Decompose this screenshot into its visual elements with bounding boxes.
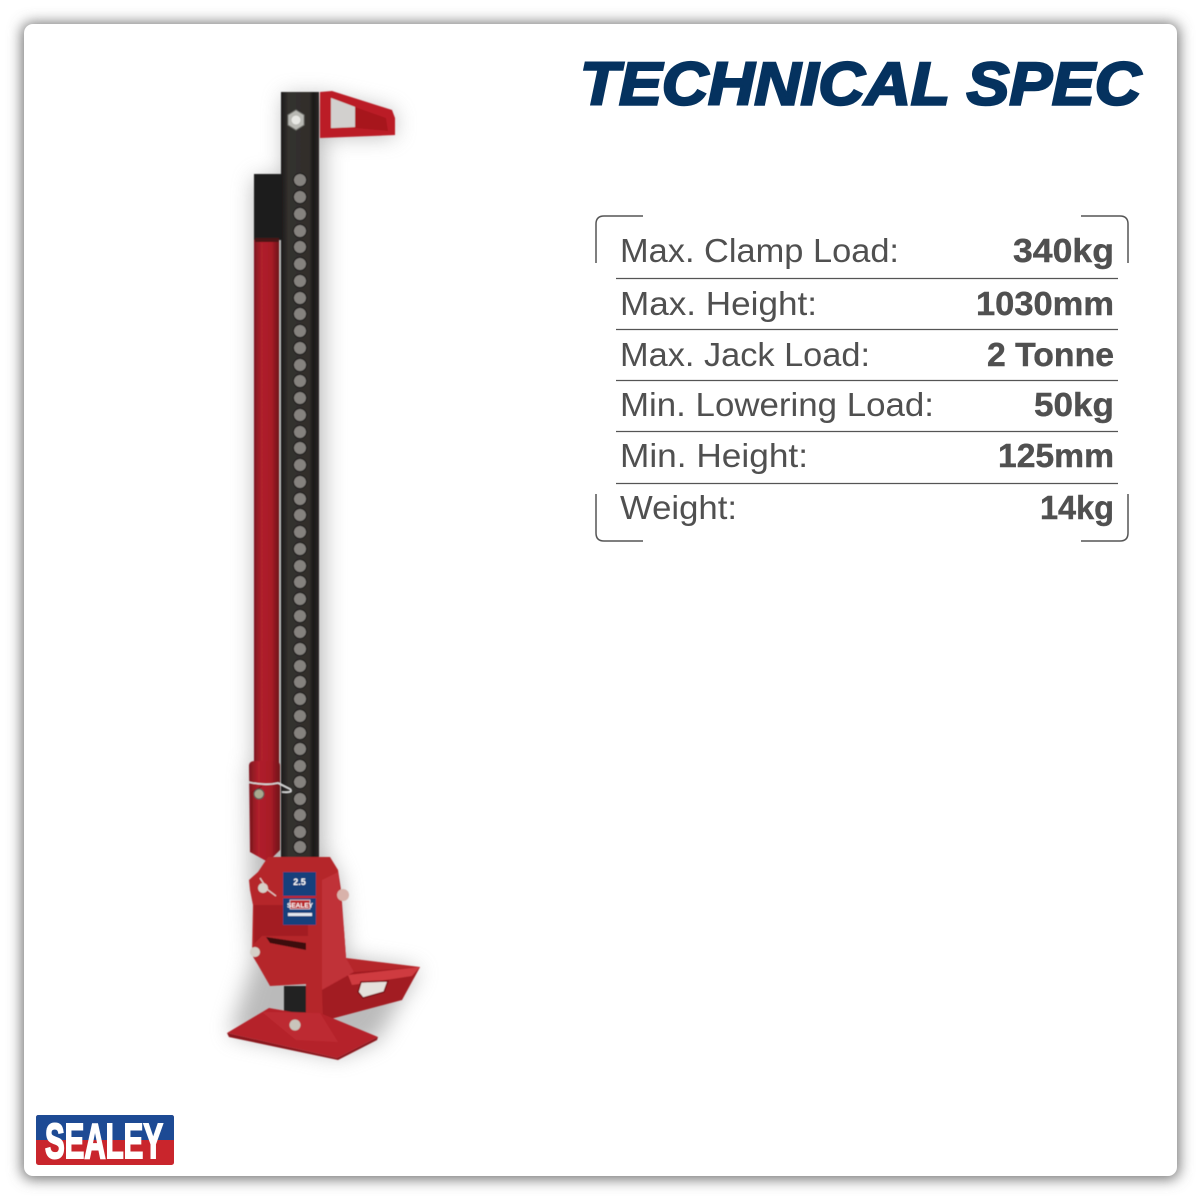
blue data plate on jack body: 2.5 (293, 877, 306, 887)
spec row: max jack load: Max. Jack Load: (620, 336, 870, 373)
spec row: max clamp load (620, 232, 1114, 269)
rack bar below body (284, 986, 306, 1014)
blue data plate on jack body: SEALEY (287, 902, 314, 910)
spec row: min height (620, 437, 1114, 474)
handle socket (249, 761, 280, 862)
spec row: max jack load: 2 Tonne (987, 336, 1114, 373)
spec row: max jack load (620, 336, 1114, 373)
slot in foot plate (358, 981, 388, 998)
spec row: max height: 1030mm (976, 285, 1114, 322)
cotter pins (258, 883, 268, 893)
red jack body (249, 857, 420, 1021)
logo: Sealey: SEALEY (45, 1115, 163, 1169)
spec row: max clamp load: 340kg (1013, 232, 1114, 269)
spec row: max clamp load: Max. Clamp Load: (620, 232, 899, 269)
spec row: min lowering load: 50kg (1034, 386, 1114, 423)
spec row: min lowering load (620, 386, 1114, 423)
spec row: min height: Min. Height: (620, 437, 808, 474)
shadow behind jack (230, 96, 420, 1056)
table row dividers (616, 278, 1118, 484)
spec row: weight: Weight: (620, 489, 737, 526)
red handle tube (254, 174, 281, 768)
red base plate (227, 1008, 378, 1060)
slot in body (266, 937, 306, 950)
right face highlights (322, 872, 354, 990)
black rack bar with holes (281, 92, 319, 862)
spec row: min lowering load: Min. Lowering Load: (620, 386, 934, 423)
pin clip on socket (248, 782, 291, 799)
icon: high lift farm jack product photo (227, 91, 420, 1060)
panel: specification table (596, 216, 1128, 541)
blue data plate on jack body (283, 872, 316, 925)
logo: Sealey (36, 1115, 174, 1169)
recessed side panel (254, 905, 308, 944)
spec row: weight: 14kg (1040, 489, 1114, 526)
title: TECHNICAL SPEC (580, 50, 1143, 118)
spec row: max height: Max. Height: (620, 285, 817, 322)
spec row: min height: 125mm (998, 437, 1114, 474)
bolt at top of bar (288, 110, 304, 130)
spec row: max height (620, 285, 1114, 322)
red top clamp bracket (320, 91, 395, 138)
table corner brackets (596, 216, 1128, 541)
spec row: weight (620, 489, 1114, 526)
